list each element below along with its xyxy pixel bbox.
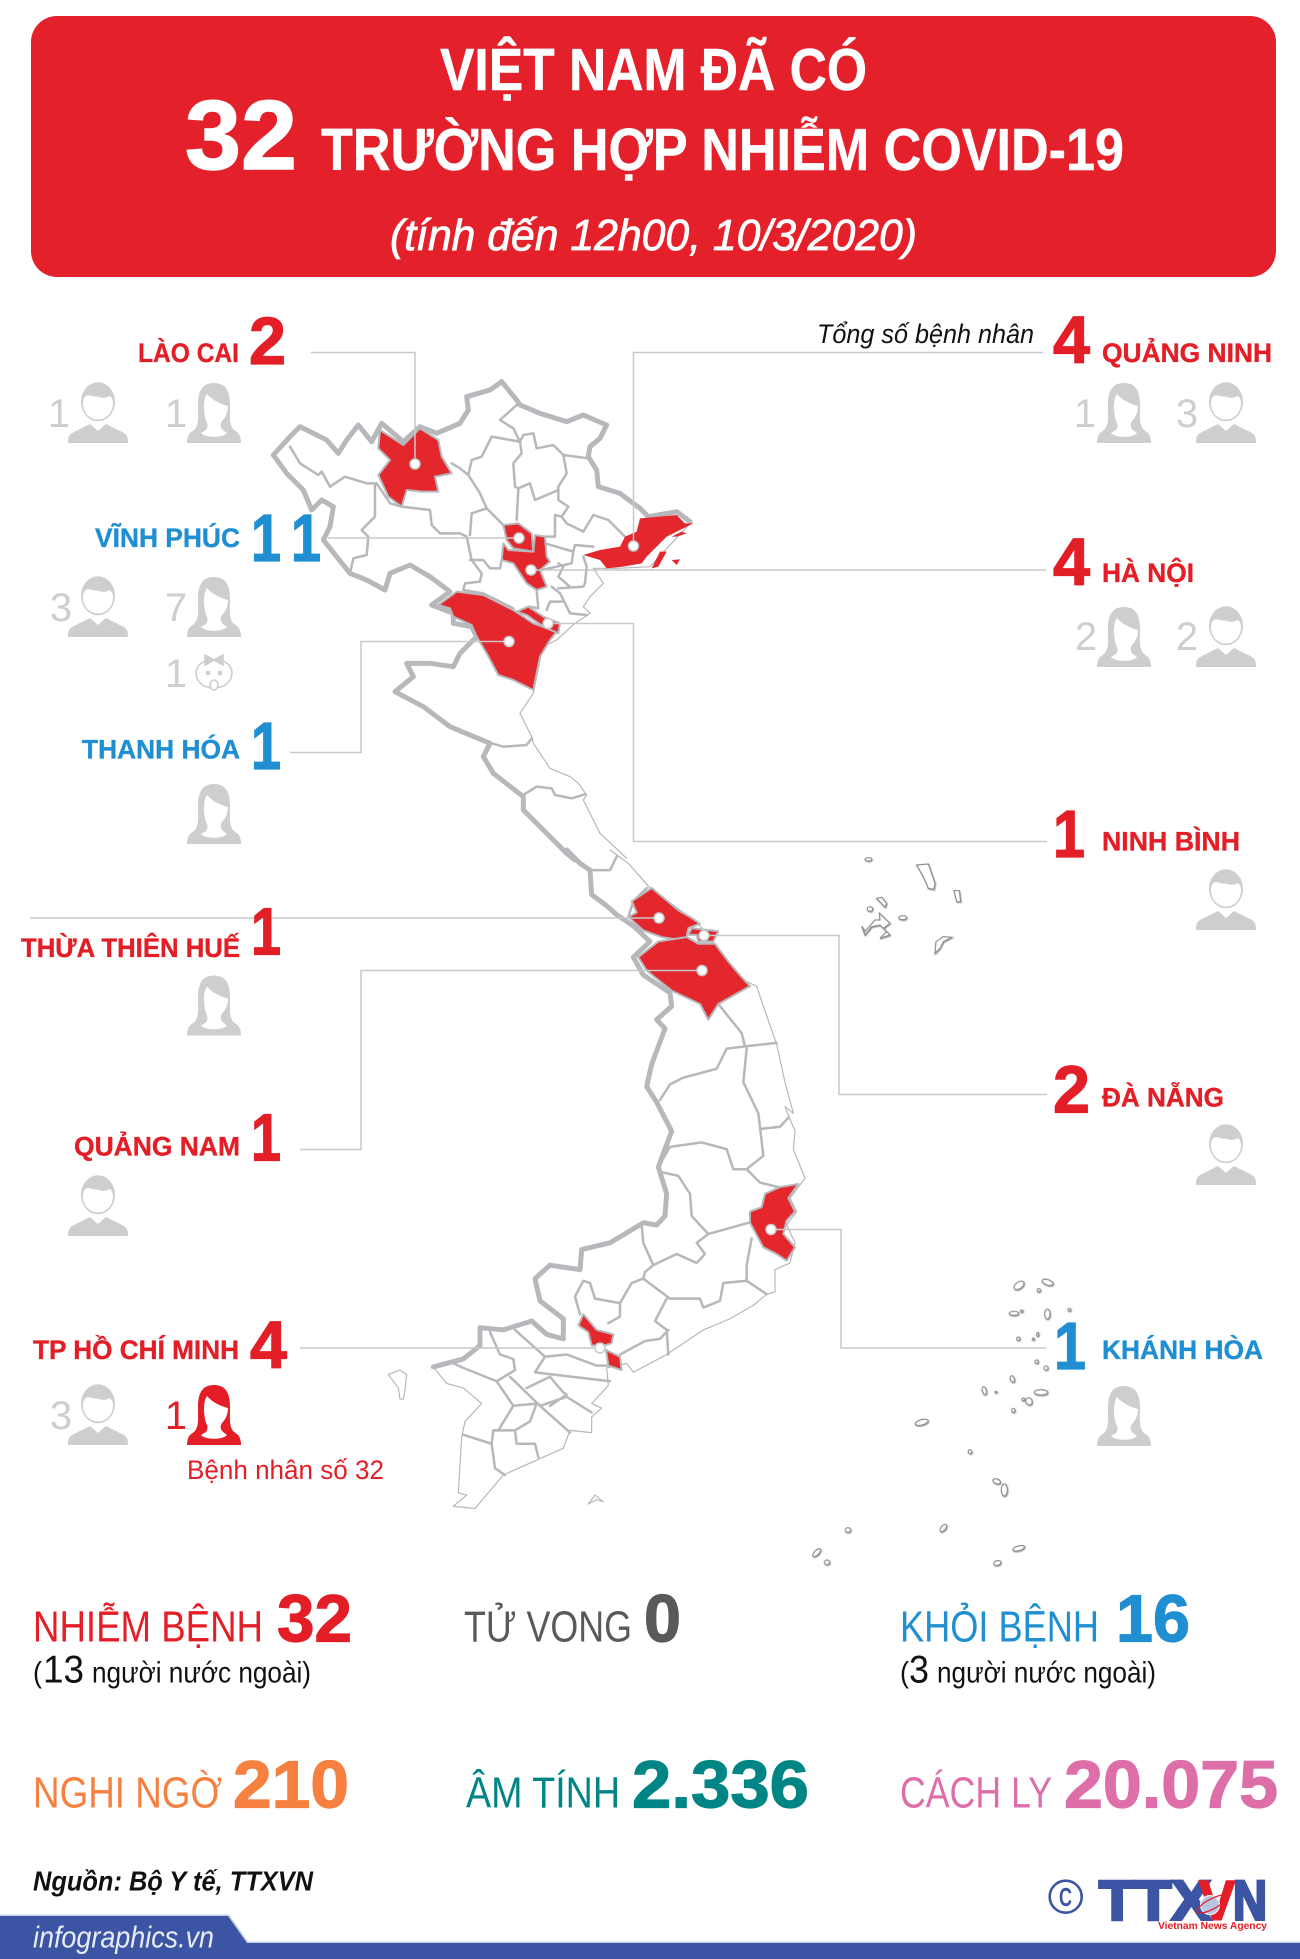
wordmark: N <box>1233 1868 1267 1932</box>
foreign note: 13 <box>43 1648 84 1692</box>
female count: 1 <box>165 1394 187 1438</box>
icon: male <box>68 382 128 443</box>
female count: 1 <box>1074 392 1096 436</box>
stat: nghi ngờ <box>33 1748 349 1822</box>
total: 1 <box>291 501 321 576</box>
panel: TP Hồ Chí Minh <box>33 1308 384 1485</box>
total: 1 <box>1053 797 1085 872</box>
copyright mark <box>1050 1881 1082 1913</box>
icon: female <box>1097 607 1151 667</box>
wordmark: V <box>1199 1868 1235 1932</box>
tagline: Vietnam News Agency <box>1158 1920 1267 1932</box>
footer banner <box>0 1914 1300 1959</box>
male count: 1 <box>48 392 70 436</box>
south map outline and provinces <box>388 850 805 1508</box>
total: 1 <box>251 709 281 784</box>
foreign note <box>900 1648 1156 1692</box>
header banner <box>31 16 1276 277</box>
panel: Thanh Hóa <box>82 709 281 844</box>
icon: male <box>1196 1124 1256 1185</box>
panel: Quảng Nam <box>68 1100 281 1236</box>
value: 16 <box>1116 1582 1190 1656</box>
total <box>251 501 321 576</box>
label: TỬ VONG <box>464 1600 632 1652</box>
icon: male <box>68 1384 128 1445</box>
stat: cách ly <box>900 1748 1278 1822</box>
female count: 1 <box>165 392 187 436</box>
icon: female <box>187 577 241 637</box>
title number 32: 32 <box>185 80 297 190</box>
panel: Hà Nội <box>1053 525 1256 667</box>
icon: male <box>68 576 128 637</box>
panel: Đà Nẵng <box>1053 1052 1256 1185</box>
label: VĨNH PHÚC <box>95 523 240 553</box>
patient note: Bệnh nhân số 32 <box>187 1455 384 1485</box>
red provinces south <box>578 888 798 1370</box>
icon: male <box>1196 606 1256 667</box>
stat: nhiễm bệnh <box>33 1582 352 1692</box>
total: 1 <box>251 894 281 970</box>
title line 2: TRƯỜNG HỢP NHIỄM COVID-19 <box>321 116 1124 183</box>
foreign note: 3 <box>909 1648 929 1692</box>
label: THANH HÓA <box>82 734 240 764</box>
panel: Quảng Ninh <box>817 303 1272 443</box>
wordmark <box>1099 1868 1267 1932</box>
label: HÀ NỘI <box>1102 558 1194 588</box>
panel: Khánh Hòa <box>1054 1309 1263 1446</box>
leader lines <box>30 352 1047 1348</box>
total: 4 <box>250 1308 287 1383</box>
panel: Thừa Thiên Huế <box>21 894 281 1036</box>
value: 0 <box>644 1582 681 1656</box>
globe <box>1195 1892 1229 1916</box>
male count: 3 <box>50 586 72 630</box>
value: 210 <box>233 1748 349 1822</box>
label: QUẢNG NINH <box>1102 338 1272 368</box>
copyright mark: C <box>1059 1882 1072 1912</box>
male count: 2 <box>1176 615 1198 659</box>
male count: 3 <box>50 1394 72 1438</box>
title line 1: VIỆT NAM ĐÃ CÓ <box>440 36 867 103</box>
panel: Ninh Bình <box>1053 797 1256 930</box>
stat: tử vong <box>464 1582 681 1656</box>
label: ÂM TÍNH <box>466 1768 620 1818</box>
male count: 3 <box>1176 392 1198 436</box>
icon: female <box>187 976 241 1036</box>
icon: male <box>1196 382 1256 443</box>
icon: female red <box>187 1385 241 1445</box>
source: Nguồn: Bộ Y tế, TTXVN <box>33 1866 314 1896</box>
foreign note: ( <box>33 1656 42 1690</box>
total: 1 <box>1054 1309 1086 1384</box>
icon: male <box>68 1175 128 1236</box>
map of Vietnam <box>273 382 1071 1566</box>
total: 4 <box>1053 303 1090 378</box>
wordmark: TTX <box>1099 1868 1211 1932</box>
label: QUẢNG NAM <box>74 1132 240 1162</box>
panel: Vĩnh Phúc <box>50 501 321 696</box>
stat: âm tính <box>466 1748 809 1822</box>
child count: 1 <box>165 652 187 696</box>
foreign note: ( <box>900 1656 909 1690</box>
red provinces north <box>378 428 693 690</box>
value: 2.336 <box>632 1748 809 1822</box>
label: LÀO CAI <box>138 338 239 368</box>
north map outline and provinces <box>273 382 693 860</box>
label: NINH BÌNH <box>1102 826 1240 856</box>
Trường Sa islands <box>811 1278 1071 1566</box>
label: NHIỄM BỆNH <box>33 1602 263 1652</box>
logo: TTXVN <box>1050 1868 1267 1932</box>
label: CÁCH LY <box>900 1768 1052 1818</box>
icon: female <box>1097 1386 1151 1446</box>
label: ĐÀ NẴNG <box>1102 1082 1224 1112</box>
total: 2 <box>1053 1052 1090 1128</box>
label: KHÁNH HÒA <box>1102 1335 1263 1365</box>
icon: female <box>187 383 241 443</box>
female count: 7 <box>165 586 187 630</box>
value: 20.075 <box>1064 1748 1278 1822</box>
Hoàng Sa islands <box>862 858 961 953</box>
female count: 2 <box>1075 615 1097 659</box>
total: 1 <box>251 1100 281 1176</box>
icon: male <box>1196 869 1256 930</box>
foreign note <box>33 1648 311 1692</box>
icon: female <box>1097 383 1151 443</box>
location dots <box>410 459 776 1353</box>
total patients note: Tổng số bệnh nhân <box>817 319 1034 349</box>
label: TP HỒ CHÍ MINH <box>33 1335 239 1365</box>
foreign note: người nước ngoài) <box>937 1656 1156 1690</box>
website: infographics.vn <box>33 1920 214 1954</box>
icon: baby <box>196 655 232 690</box>
panel: Lào Cai <box>48 304 286 443</box>
total: 1 <box>251 501 281 576</box>
foreign note: người nước ngoài) <box>92 1656 311 1690</box>
icon: female <box>187 784 241 844</box>
total: 2 <box>249 304 286 379</box>
total: 4 <box>1053 525 1090 600</box>
value: 32 <box>277 1582 352 1656</box>
label: NGHI NGỜ <box>33 1768 222 1818</box>
label: KHỎI BỆNH <box>900 1600 1099 1652</box>
label: THỪA THIÊN HUẾ <box>21 933 240 963</box>
stat: khỏi bệnh <box>900 1582 1190 1692</box>
date subtitle: (tính đến 12h00, 10/3/2020) <box>390 211 917 260</box>
